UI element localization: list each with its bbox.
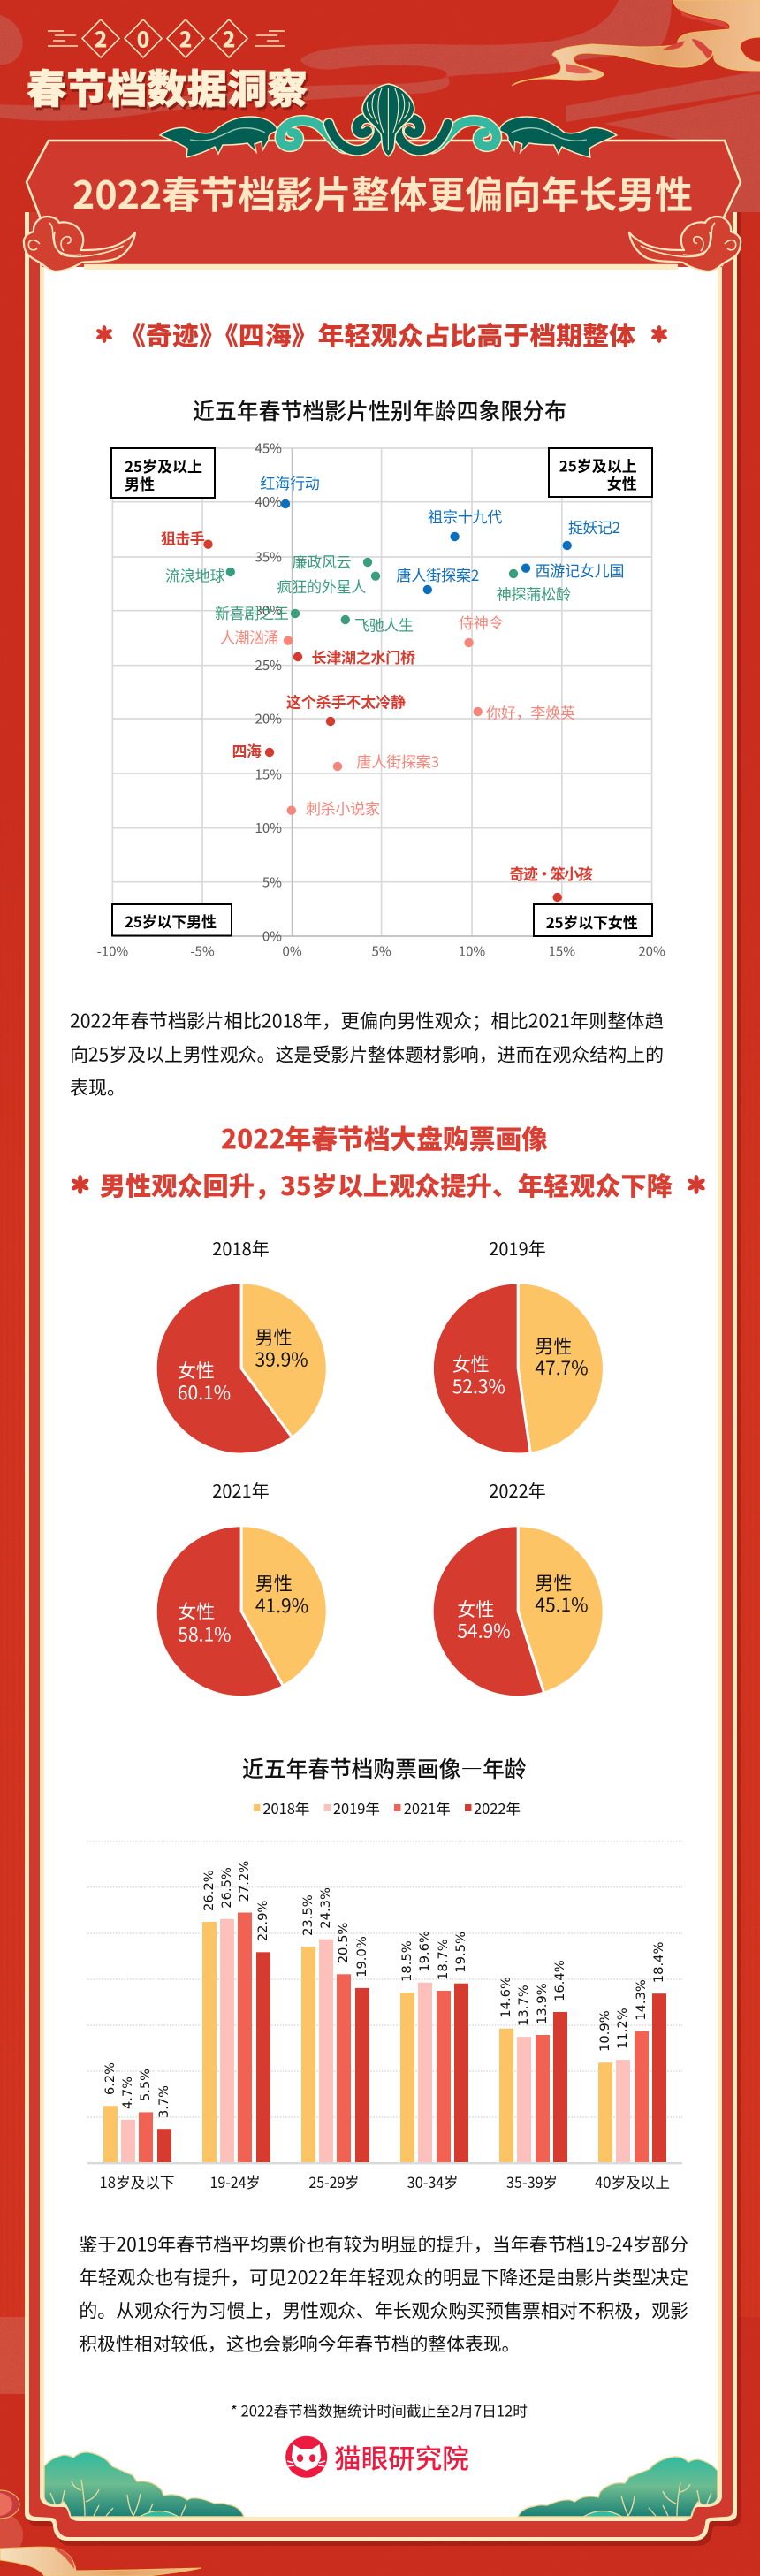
bars: 19-24岁: 26.5%	[220, 1867, 234, 1909]
x axis labels	[97, 942, 665, 960]
legend: 2021年	[404, 1797, 451, 1818]
legend	[254, 1797, 521, 1818]
icon: right cloud	[629, 217, 741, 271]
bars: 40岁及以上: 10.9%	[598, 2010, 612, 2052]
bars: 40岁及以上: 18.4%	[652, 1941, 666, 1983]
bar chart: age	[87, 1841, 682, 2192]
bars: 30-34岁: 18.5%	[400, 1940, 414, 1982]
text block: paragraph 2: 鉴于2019年春节档平均票价也有较为明显的提升，当年春节档19-24岁部分	[79, 2230, 688, 2257]
decoration: gold ribbon bottom left	[0, 2547, 201, 2576]
bars: 25-29岁: 23.5%	[301, 1894, 315, 1936]
x axis labels: 10%	[459, 942, 485, 960]
pie chart: 2019: 52.3%	[452, 1373, 505, 1399]
category labels: 19-24岁	[210, 2170, 260, 2192]
red points: 奇迹·笨小孩	[509, 862, 593, 884]
pie chart: 2019: 2019年	[489, 1235, 546, 1261]
pie chart: 2022: 男性	[535, 1569, 572, 1596]
icon: cat	[285, 2436, 327, 2478]
text block: paragraph 1: 2022年春节档影片相比2018年，更偏向男性观众；相比2021年则整体趋	[70, 1007, 664, 1033]
bars: 25-29岁: 20.5%	[337, 1923, 351, 1963]
bars: 35-39岁: 13.9%	[536, 1983, 550, 2024]
decoration: gold ribbon top right	[512, 0, 760, 86]
blue points: 祖宗十九代	[428, 505, 502, 527]
pie chart: 2018: 39.9%	[255, 1345, 308, 1372]
icon: flower left	[95, 325, 113, 343]
y axis labels: 25%	[255, 656, 282, 674]
pie chart: 2021	[156, 1477, 327, 1697]
category labels: 18岁及以下	[99, 2170, 175, 2192]
footnote: * 2022春节档数据统计时间截止至2月7日12时	[231, 2399, 528, 2420]
x axis labels: 15%	[549, 942, 575, 960]
logo text: 猫眼研究院	[334, 2437, 469, 2476]
red points	[161, 527, 593, 902]
legend: 2018年	[262, 1797, 309, 1818]
category labels: 25-29岁	[308, 2170, 359, 2192]
legend: 2019年	[333, 1797, 380, 1818]
salmon points: 侍神令	[459, 611, 504, 633]
top title: 春节档数据洞察	[27, 57, 308, 115]
green points: 廉政风云	[293, 550, 352, 572]
salmon points	[220, 611, 575, 819]
green points	[165, 550, 571, 635]
x axis labels: -5%	[190, 942, 215, 960]
icon: flower right	[687, 1175, 706, 1194]
pie chart: 2018: 60.1%	[178, 1379, 231, 1406]
pie chart: 2022: 54.9%	[457, 1617, 511, 1643]
logo: maoyan research	[285, 2436, 469, 2478]
quadrant box: top right: 女性	[607, 472, 637, 493]
red points: 狙击手	[161, 527, 205, 548]
bars: 18岁及以下	[103, 2062, 171, 2163]
decoration: left tree	[44, 2452, 244, 2517]
y axis labels: 45%	[255, 438, 282, 458]
salmon points: 人潮汹涌	[220, 626, 279, 647]
red points: 这个杀手不太冷静	[286, 690, 406, 713]
bars: 30-34岁: 19.6%	[418, 1931, 432, 1972]
pie chart: 2019: 男性	[535, 1332, 572, 1359]
green points: 神探蒲松龄	[497, 582, 571, 605]
bars: 18岁及以下: 5.5%	[139, 2069, 153, 2101]
bars: 18岁及以下: 6.2%	[103, 2062, 118, 2095]
text block: paragraph 2: 的。从观众行为习惯上，男性观众、年长观众购买预售票相对不积极，观影	[79, 2297, 688, 2323]
pie chart: 2021: 41.9%	[255, 1592, 308, 1619]
decoration: year diamonds 2022: 0	[137, 23, 149, 53]
section heading: quadrant	[95, 316, 668, 353]
y axis labels: 30%	[255, 601, 282, 620]
quadrant box: top right: 25岁及以上	[559, 454, 637, 476]
quadrant box: top left	[111, 448, 215, 498]
decoration: year diamonds 2022: 2	[179, 23, 192, 53]
bars: 18岁及以下: 3.7%	[157, 2085, 171, 2118]
bars: 35-39岁	[499, 1960, 567, 2163]
pie chart: 2022: 45.1%	[535, 1591, 589, 1618]
text block: paragraph 1	[70, 1007, 664, 1101]
quadrant box: bottom right	[534, 904, 652, 936]
x axis labels: 0%	[283, 942, 302, 960]
green points: 疯狂的外星人	[277, 575, 366, 597]
green points: 新喜剧之王	[215, 601, 289, 623]
text block: paragraph 2: 年轻观众也有提升，可见2022年年轻观众的明显下降还是由影片类型决定	[79, 2264, 688, 2290]
category labels: 30-34岁	[407, 2170, 458, 2192]
red points: 长津湖之水门桥	[311, 645, 415, 667]
bars: 40岁及以上	[598, 1941, 666, 2163]
decoration: lantern bottom left	[0, 2490, 23, 2558]
decoration: year diamonds 2022: 2	[95, 23, 107, 53]
quadrant box: top left: 25岁及以上	[125, 454, 202, 476]
quadrant box: bottom right: 25岁以下女性	[546, 911, 638, 933]
y axis labels: 15%	[255, 766, 282, 783]
bars: 40岁及以上: 11.2%	[616, 2008, 630, 2049]
subheading text: 男性观众回升，35岁以上观众提升、年轻观众下降	[100, 1166, 673, 1203]
quadrant box: bottom left	[112, 904, 232, 935]
category labels: 40岁及以上	[595, 2170, 670, 2192]
x axis labels: -10%	[97, 942, 128, 960]
bars: 19-24岁: 22.9%	[256, 1901, 270, 1941]
y axis labels: 0%	[262, 926, 282, 946]
bars: 25-29岁: 19.0%	[355, 1936, 369, 1978]
decoration: year diamonds 2022	[48, 19, 285, 57]
legend: 2022年	[474, 1797, 521, 1818]
y axis labels: 10%	[255, 819, 282, 837]
bars: 30-34岁	[400, 1931, 468, 2163]
y axis labels: 35%	[255, 548, 282, 566]
text block: paragraph 2	[79, 2230, 688, 2357]
pie chart: 2022: 女性	[457, 1596, 494, 1622]
pie chart: 2021: 女性	[178, 1598, 215, 1625]
section heading: audience profile: 2022年春节档大盘购票画像	[221, 1118, 548, 1157]
category labels	[99, 2170, 670, 2192]
salmon points: 刺杀小说家	[306, 796, 380, 819]
blue points: 红海行动	[260, 471, 320, 493]
pie chart: 2018	[156, 1235, 327, 1454]
bars: 35-39岁: 14.6%	[499, 1977, 513, 2018]
bars: 40岁及以上: 14.3%	[635, 1979, 649, 2021]
section subheading	[71, 1166, 706, 1203]
salmon points: 唐人街探案3	[357, 750, 439, 772]
blue points: 西游记女儿国	[536, 559, 624, 581]
bars: 25-29岁: 24.3%	[319, 1887, 333, 1929]
icon: left cloud	[24, 217, 135, 271]
y axis labels: 5%	[262, 873, 282, 891]
pie chart: 2021: 58.1%	[178, 1620, 231, 1647]
pie chart: 2021: 男性	[255, 1570, 293, 1597]
pie chart: 2022	[432, 1477, 604, 1697]
bars: 25-29岁	[301, 1887, 369, 2163]
decoration: year diamonds 2022: 2	[223, 23, 235, 53]
quadrant scatter chart	[97, 438, 665, 960]
text block: paragraph 1: 表现。	[70, 1074, 125, 1101]
icon: flower right	[650, 325, 668, 343]
bars: 18岁及以下: 4.7%	[121, 2077, 135, 2109]
salmon points: 你好，李焕英	[486, 700, 575, 723]
y axis labels: 40%	[255, 492, 282, 511]
pie chart: 2022: 2022年	[489, 1477, 546, 1503]
x axis labels: 20%	[638, 942, 665, 960]
title banner	[27, 141, 741, 270]
blue points: 唐人街探案2	[396, 563, 479, 585]
banner heading: 2022春节档影片整体更偏向年长男性	[72, 165, 693, 220]
chart title: quadrant: 近五年春节档影片性别年龄四象限分布	[193, 394, 566, 426]
icon: green ornament	[160, 84, 617, 157]
bars: 35-39岁: 16.4%	[553, 1960, 567, 2001]
quadrant box: top right	[549, 448, 652, 497]
bars: 19-24岁	[202, 1861, 270, 2163]
green points: 飞驰人生	[354, 614, 414, 635]
blue points	[260, 471, 624, 594]
quadrant box: bottom left: 25岁以下男性	[125, 910, 217, 932]
text block: paragraph 1: 向25岁及以上男性观众。这是受影片整体题材影响，进而在观众结构上的	[70, 1040, 664, 1067]
decoration: right tree	[518, 2457, 718, 2517]
bars: 19-24岁: 27.2%	[238, 1861, 252, 1902]
bars: 30-34岁: 19.5%	[454, 1932, 468, 1973]
x axis labels: 5%	[372, 942, 391, 960]
chart title: age: 近五年春节档购票画像—年龄	[242, 1752, 527, 1784]
bars: 19-24岁: 26.2%	[202, 1870, 217, 1911]
pie chart: 2019	[432, 1235, 604, 1454]
pie chart: 2019: 47.7%	[535, 1354, 589, 1381]
bars: 35-39岁: 13.7%	[517, 1985, 531, 2026]
heading text: 《奇迹》《四海》年轻观众占比高于档期整体	[119, 316, 635, 353]
icon: flower left	[71, 1175, 90, 1194]
pie chart: 2018: 女性	[178, 1357, 215, 1383]
pie chart: 2019: 女性	[452, 1351, 490, 1377]
blue points: 捉妖记2	[568, 515, 620, 537]
y axis labels: 20%	[255, 709, 282, 728]
pie chart: 2018: 男性	[255, 1323, 292, 1350]
pie chart: 2021: 2021年	[212, 1477, 270, 1503]
bars: 30-34岁: 18.7%	[437, 1939, 451, 1980]
pie chart: 2018: 2018年	[212, 1235, 270, 1261]
text block: paragraph 2: 积极性相对较低，这也会影响今年春节档的整体表现。	[79, 2330, 520, 2357]
quadrant box: top left: 男性	[125, 472, 155, 494]
red points: 四海	[232, 739, 262, 761]
y axis labels	[255, 438, 282, 946]
category labels: 35-39岁	[506, 2170, 558, 2192]
green points: 流浪地球	[165, 564, 224, 585]
